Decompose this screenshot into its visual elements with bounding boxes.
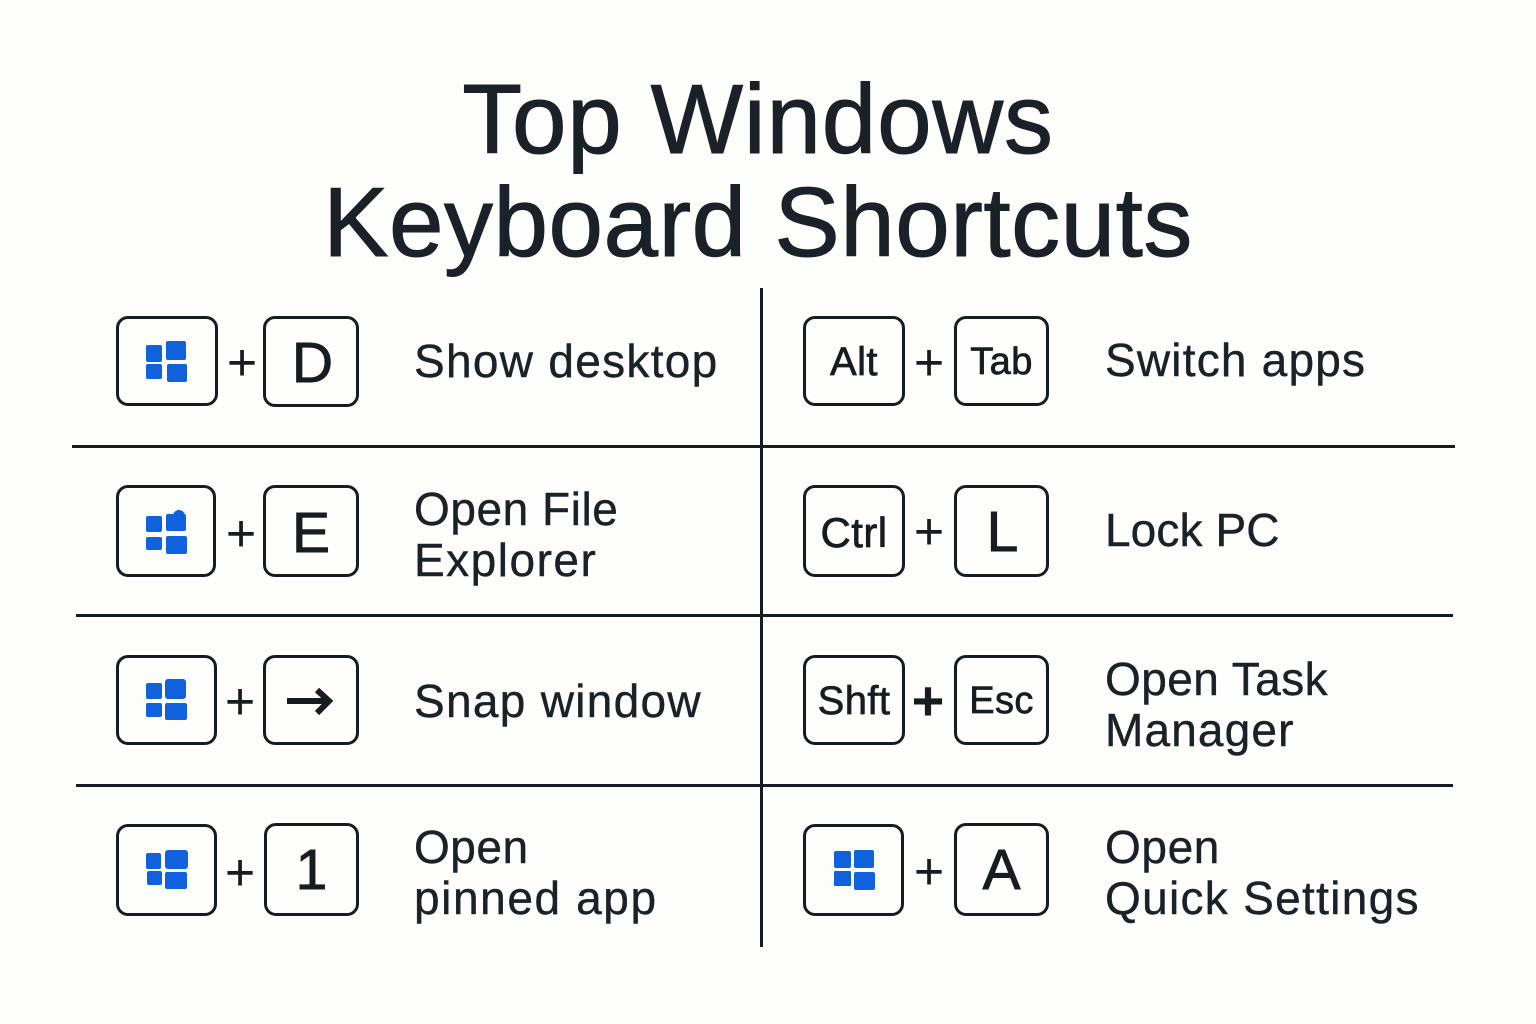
key Shft (803, 655, 905, 745)
icon: windows key (116, 485, 216, 577)
label: Lock PC (1105, 504, 1280, 556)
label: Explorer (414, 534, 597, 586)
key D: D (292, 331, 333, 395)
key 1 (264, 823, 359, 916)
key A (954, 823, 1049, 916)
label (1105, 821, 1420, 924)
row: open file explorer (116, 483, 618, 586)
key A: A (982, 838, 1021, 902)
icon: windows key (116, 824, 217, 916)
label: Switch apps (1105, 334, 1366, 386)
plus: + (226, 505, 256, 563)
icon: windows key (116, 655, 217, 745)
key L (954, 485, 1049, 577)
key Esc (954, 655, 1049, 745)
key L: L (987, 500, 1018, 564)
icon: windows key (803, 824, 904, 916)
row: lock pc (803, 485, 1280, 577)
label (414, 821, 658, 924)
row: switch apps (803, 316, 1366, 406)
label: pinned app (414, 872, 658, 924)
label (414, 483, 618, 586)
key Alt (803, 316, 905, 406)
label: Show desktop (414, 335, 719, 387)
plus: + (914, 334, 944, 392)
label: Open (1105, 821, 1220, 873)
key 1: 1 (296, 838, 327, 902)
row: open task manager (803, 653, 1328, 756)
key Ctrl (803, 485, 905, 577)
key Shft: Shft (818, 678, 890, 722)
row: snap window (116, 655, 702, 745)
plus: + (225, 844, 255, 902)
label: Open (414, 821, 529, 873)
key E (263, 485, 359, 577)
key Tab: Tab (970, 341, 1033, 383)
plus: + (225, 673, 255, 731)
label: Snap window (414, 675, 702, 727)
label: Quick Settings (1105, 872, 1420, 924)
key Alt: Alt (830, 340, 878, 384)
key Ctrl: Ctrl (821, 508, 887, 556)
label: Open File (414, 483, 618, 535)
label: Open Task (1105, 653, 1328, 705)
title: Top Windows (462, 64, 1054, 174)
row: show desktop (116, 316, 719, 407)
row: open quick settings (803, 821, 1420, 924)
key Tab (954, 316, 1049, 406)
plus: + (914, 503, 944, 561)
plus: + (227, 334, 257, 392)
row: open pinned app (116, 821, 658, 924)
label: Manager (1105, 704, 1295, 756)
title: Keyboard Shortcuts (323, 167, 1193, 277)
title (323, 64, 1193, 277)
label (1105, 653, 1328, 756)
icon: windows key (116, 316, 218, 406)
key arrow (263, 655, 359, 745)
key E: E (292, 500, 330, 564)
plus: + (914, 843, 944, 901)
plus: + (912, 669, 944, 732)
key Esc: Esc (969, 680, 1034, 722)
key D (263, 316, 359, 407)
